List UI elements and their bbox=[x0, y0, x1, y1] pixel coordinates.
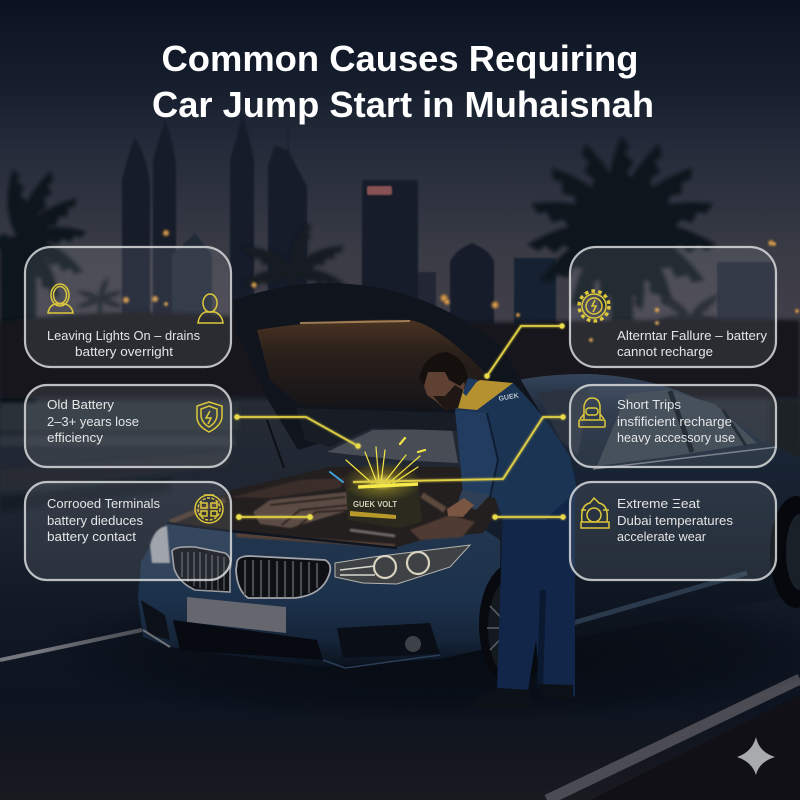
car: windshield bbox=[327, 429, 458, 463]
car: hood inner lining bbox=[257, 320, 490, 410]
title bbox=[152, 38, 654, 125]
background: right palm tree bbox=[526, 137, 718, 347]
car: lower intake bbox=[173, 620, 323, 660]
car: side body and rear bbox=[470, 374, 800, 660]
road marking left bbox=[0, 630, 142, 660]
car: bonnet edge highlight bbox=[167, 523, 397, 548]
mechanic: hand bbox=[447, 498, 474, 517]
car: side windows bbox=[597, 390, 757, 466]
mechanic: hair bbox=[419, 352, 468, 386]
text: extreme heat: Dubai temperatures bbox=[617, 513, 734, 528]
background: evening sky bbox=[0, 0, 800, 420]
sign on tower bbox=[367, 186, 392, 195]
car: windscreen side bbox=[537, 388, 590, 455]
icon: sparkle watermark bbox=[737, 737, 775, 775]
street lights bbox=[122, 228, 800, 343]
battery label: GUEK VOLT bbox=[353, 500, 397, 509]
icon: person bust bbox=[198, 294, 223, 323]
car: hood strut bbox=[267, 420, 284, 468]
mechanic: beard bbox=[433, 385, 463, 410]
icon: round gauge bbox=[195, 495, 223, 523]
panel: corroded terminals bbox=[25, 482, 231, 580]
mechanic: shoes bbox=[468, 688, 530, 708]
title: Common Causes Requiring bbox=[162, 38, 638, 79]
connector: extreme heat card bbox=[492, 514, 566, 520]
text: corroded terminals: battery contact bbox=[47, 529, 136, 544]
car: left air intake bbox=[141, 600, 170, 640]
text: extreme heat: accelerate wear bbox=[617, 529, 707, 544]
car: number plate bbox=[187, 597, 286, 633]
battery stripe bbox=[350, 511, 396, 519]
text: old battery: 2–3+ years lose bbox=[47, 414, 139, 429]
car: left headlight bbox=[150, 526, 170, 563]
battery with spark bbox=[330, 438, 425, 528]
text: corroded terminals bbox=[47, 496, 160, 544]
background: Dubai skyline towers bbox=[122, 113, 775, 333]
connector: old battery card bbox=[234, 414, 361, 449]
panel: alternator failure bbox=[570, 247, 776, 367]
text: short trips: insfificient recharge bbox=[617, 414, 732, 429]
text: alternator failure: Alterntar Fallure – battery bbox=[617, 328, 767, 343]
text: short trips bbox=[617, 397, 735, 445]
icon: gear with bolt bbox=[579, 291, 609, 321]
connector: short trips card bbox=[353, 414, 566, 482]
sparks bbox=[330, 438, 425, 484]
connector: corroded terminals card bbox=[236, 514, 313, 520]
car: side sill highlight bbox=[573, 573, 747, 623]
panel: leaving lights on bbox=[25, 247, 231, 367]
ground shadow under car bbox=[40, 578, 800, 722]
car: front wheel bbox=[479, 563, 547, 687]
text: leaving lights on: battery overright bbox=[75, 344, 173, 359]
text: corroded terminals: Corrooed Terminals bbox=[47, 496, 160, 511]
mechanic: jacket logo: GUEK bbox=[498, 393, 519, 403]
text: alternator failure bbox=[617, 328, 767, 359]
spark glow bbox=[342, 462, 422, 502]
mechanic: face bbox=[422, 368, 465, 410]
text: leaving lights on: Leaving Lights On – drains bbox=[47, 328, 200, 343]
title: Car Jump Start in Muhaisnah bbox=[152, 84, 654, 125]
car: right air intake bbox=[337, 623, 440, 658]
mechanic: cuff bbox=[458, 490, 490, 510]
background: left palm tree bbox=[0, 168, 87, 410]
car: left bumper lip bbox=[143, 630, 170, 647]
car: engine bay bbox=[167, 467, 510, 547]
text: old battery bbox=[47, 397, 139, 445]
car: open hood bbox=[233, 283, 540, 468]
car: grille left kidney bbox=[172, 547, 231, 592]
background: road bbox=[0, 395, 800, 800]
text: old battery: Old Battery bbox=[47, 397, 115, 412]
text: extreme heat bbox=[617, 496, 734, 544]
text: leaving lights on bbox=[47, 328, 200, 359]
icon: seat and battery bbox=[579, 398, 605, 427]
mechanic: sleeve bbox=[455, 410, 498, 497]
text: old battery: efficiency bbox=[47, 430, 104, 445]
car: right headlight bbox=[335, 545, 470, 584]
mechanic: trousers bbox=[497, 470, 575, 697]
panel: extreme heat bbox=[570, 482, 776, 580]
road marking right bbox=[547, 679, 800, 800]
background: road bands bbox=[0, 400, 800, 512]
text: extreme heat: Extreme Ξeat bbox=[617, 496, 700, 511]
text: alternator failure: cannot recharge bbox=[617, 344, 713, 359]
text: short trips: heavy accessory use bbox=[617, 430, 735, 445]
mechanic: yellow shoulder bbox=[455, 380, 513, 410]
icon: shield with bolt bbox=[197, 402, 222, 432]
mechanic: jacket bbox=[455, 380, 577, 520]
connector: hood to alternator card bbox=[484, 323, 565, 379]
mechanic bbox=[419, 352, 577, 708]
car: lower lip bbox=[323, 655, 440, 668]
car: rear wheel bbox=[770, 496, 800, 608]
panel: old battery bbox=[25, 385, 231, 467]
text: corroded terminals: battery dieduces bbox=[47, 513, 143, 528]
panel: short trips bbox=[570, 385, 776, 467]
verge bottom right bbox=[590, 695, 800, 800]
car: grille right kidney bbox=[236, 556, 330, 598]
background: small palms and tree line bbox=[0, 220, 800, 398]
car: fog light bbox=[405, 636, 421, 652]
icon: sun gear on base bbox=[581, 498, 609, 528]
car: front body bbox=[138, 500, 500, 667]
icon: person with headset bbox=[48, 284, 73, 313]
text: short trips: Short Trips bbox=[617, 397, 682, 412]
mechanic: collar bbox=[463, 378, 478, 396]
battery body bbox=[346, 484, 422, 528]
